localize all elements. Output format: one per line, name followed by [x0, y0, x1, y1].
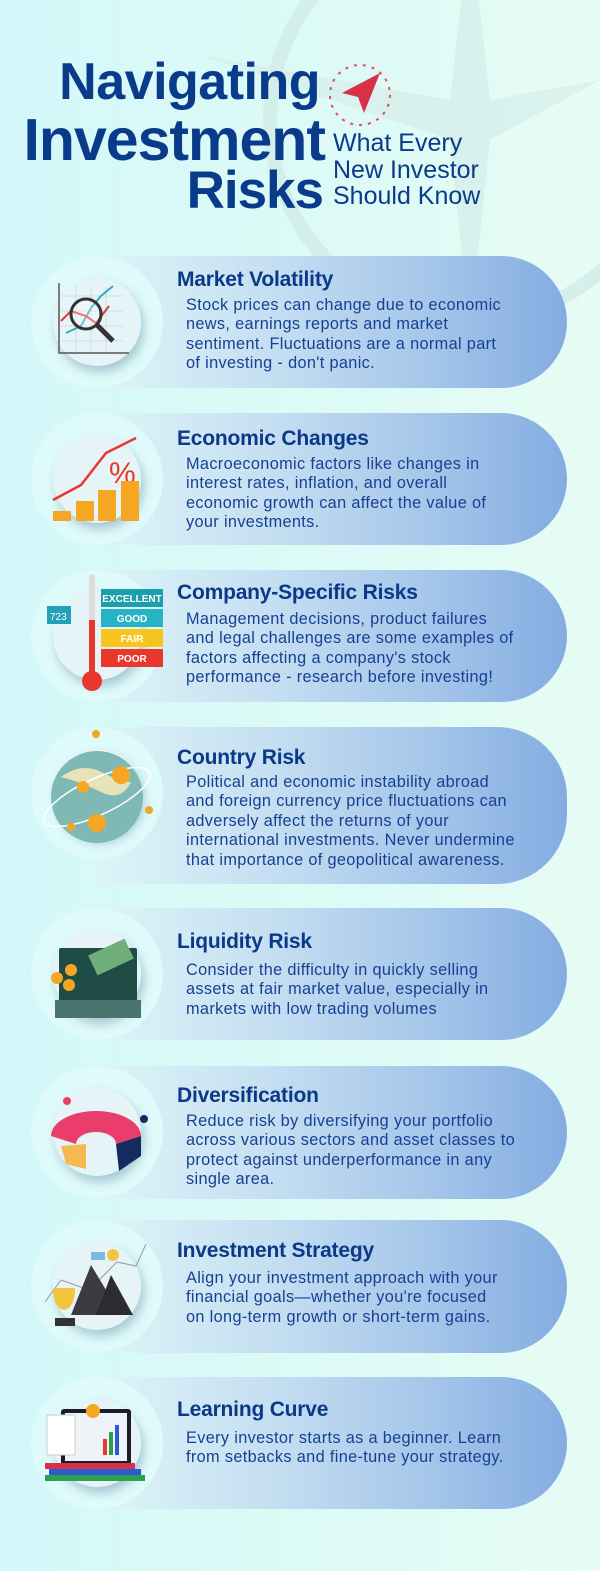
subtitle: Should Know: [333, 182, 480, 210]
text: assets at fair market value, especially in: [186, 980, 488, 998]
text: interest rates, inflation, and overall: [186, 474, 447, 492]
title: Navigating: [59, 53, 320, 111]
text: adversely affect the returns of your: [186, 812, 449, 830]
text: sentiment. Fluctuations are a normal part: [186, 335, 496, 353]
text: [186, 455, 486, 531]
text: on long-term growth or short-term gains.: [186, 1308, 490, 1326]
heading: Company-Specific Risks: [177, 581, 418, 604]
text: factors affecting a company's stock: [186, 649, 451, 667]
text: Stock prices can change due to economic: [186, 296, 501, 314]
panel: market volatility: [31, 256, 567, 388]
panel: diversification: [31, 1066, 567, 1199]
icon: thermometer rating: POOR: [117, 654, 148, 665]
text: and legal challenges are some examples of: [186, 629, 514, 647]
text: [186, 1112, 515, 1188]
icon: trophy and mountains: [44, 1244, 146, 1326]
title: Investment: [24, 107, 325, 173]
panel: company-specific risks: [31, 570, 567, 702]
subtitle: [333, 129, 480, 210]
panel: liquidity risk: [31, 908, 567, 1040]
heading: Economic Changes: [177, 427, 369, 450]
text: of investing - don't panic.: [186, 354, 375, 372]
text: and foreign currency price fluctuations can: [186, 792, 507, 810]
heading: Market Volatility: [177, 268, 333, 291]
panel: learning curve: [31, 1377, 567, 1509]
text: from setbacks and fine-tune your strategy.: [186, 1448, 504, 1466]
text: markets with low trading volumes: [186, 1000, 437, 1018]
decorative compass watermark: [204, 0, 600, 304]
heading: Learning Curve: [177, 1398, 328, 1421]
text: [186, 1429, 504, 1466]
text: Reduce risk by diversifying your portfolio: [186, 1112, 493, 1130]
icon: globe with coins: [43, 730, 153, 843]
text: [186, 773, 515, 869]
text: financial goals—whether you're focused: [186, 1288, 487, 1306]
text: Consider the difficulty in quickly selling: [186, 961, 478, 979]
icon: laptop with chart: [45, 1404, 145, 1481]
text: single area.: [186, 1170, 274, 1188]
text: international investments. Never undermine: [186, 831, 515, 849]
text: Management decisions, product failures: [186, 610, 487, 628]
text: news, earnings reports and market: [186, 315, 448, 333]
heading: Country Risk: [177, 746, 305, 769]
text: Political and economic instability abroad: [186, 773, 489, 791]
subtitle: What Every: [333, 129, 462, 157]
icon: thermometer rating: 723: [50, 612, 67, 623]
heading: Investment Strategy: [177, 1239, 374, 1262]
text: Align your investment approach with your: [186, 1269, 498, 1287]
heading: Diversification: [177, 1084, 319, 1107]
icon: briefcase with money: [51, 938, 141, 1018]
icon: thermometer rating: EXCELLENT: [102, 594, 162, 605]
icon: 3D ring chart: [51, 1097, 148, 1171]
title: [24, 53, 480, 220]
icon: thermometer rating: GOOD: [117, 614, 147, 625]
text: [186, 610, 514, 686]
panel: investment strategy: [31, 1220, 567, 1353]
text: Macroeconomic factors like changes in: [186, 455, 479, 473]
text: that importance of geopolitical awareness.: [186, 851, 505, 869]
panel: economic changes: [31, 413, 567, 545]
text: your investments.: [186, 513, 320, 531]
text: performance - research before investing!: [186, 668, 493, 686]
text: [186, 1269, 498, 1326]
icon: thermometer rating: [47, 574, 163, 691]
subtitle: New Investor: [333, 156, 479, 184]
icon: chart magnifier: [58, 283, 129, 354]
text: economic growth can affect the value of: [186, 494, 486, 512]
icon: coins and percent: [52, 436, 139, 521]
icon: compass arrow: [329, 64, 391, 126]
heading: Liquidity Risk: [177, 930, 312, 953]
icon: coins and percent: %: [109, 457, 136, 490]
text: protect against underperformance in any: [186, 1151, 492, 1169]
panel: country risk: [31, 727, 567, 884]
title: Risks: [187, 161, 323, 220]
text: across various sectors and asset classes to: [186, 1131, 515, 1149]
text: Every investor starts as a beginner. Learn: [186, 1429, 501, 1447]
text: [186, 961, 488, 1018]
icon: thermometer rating: FAIR: [121, 634, 144, 645]
text: [186, 296, 501, 372]
